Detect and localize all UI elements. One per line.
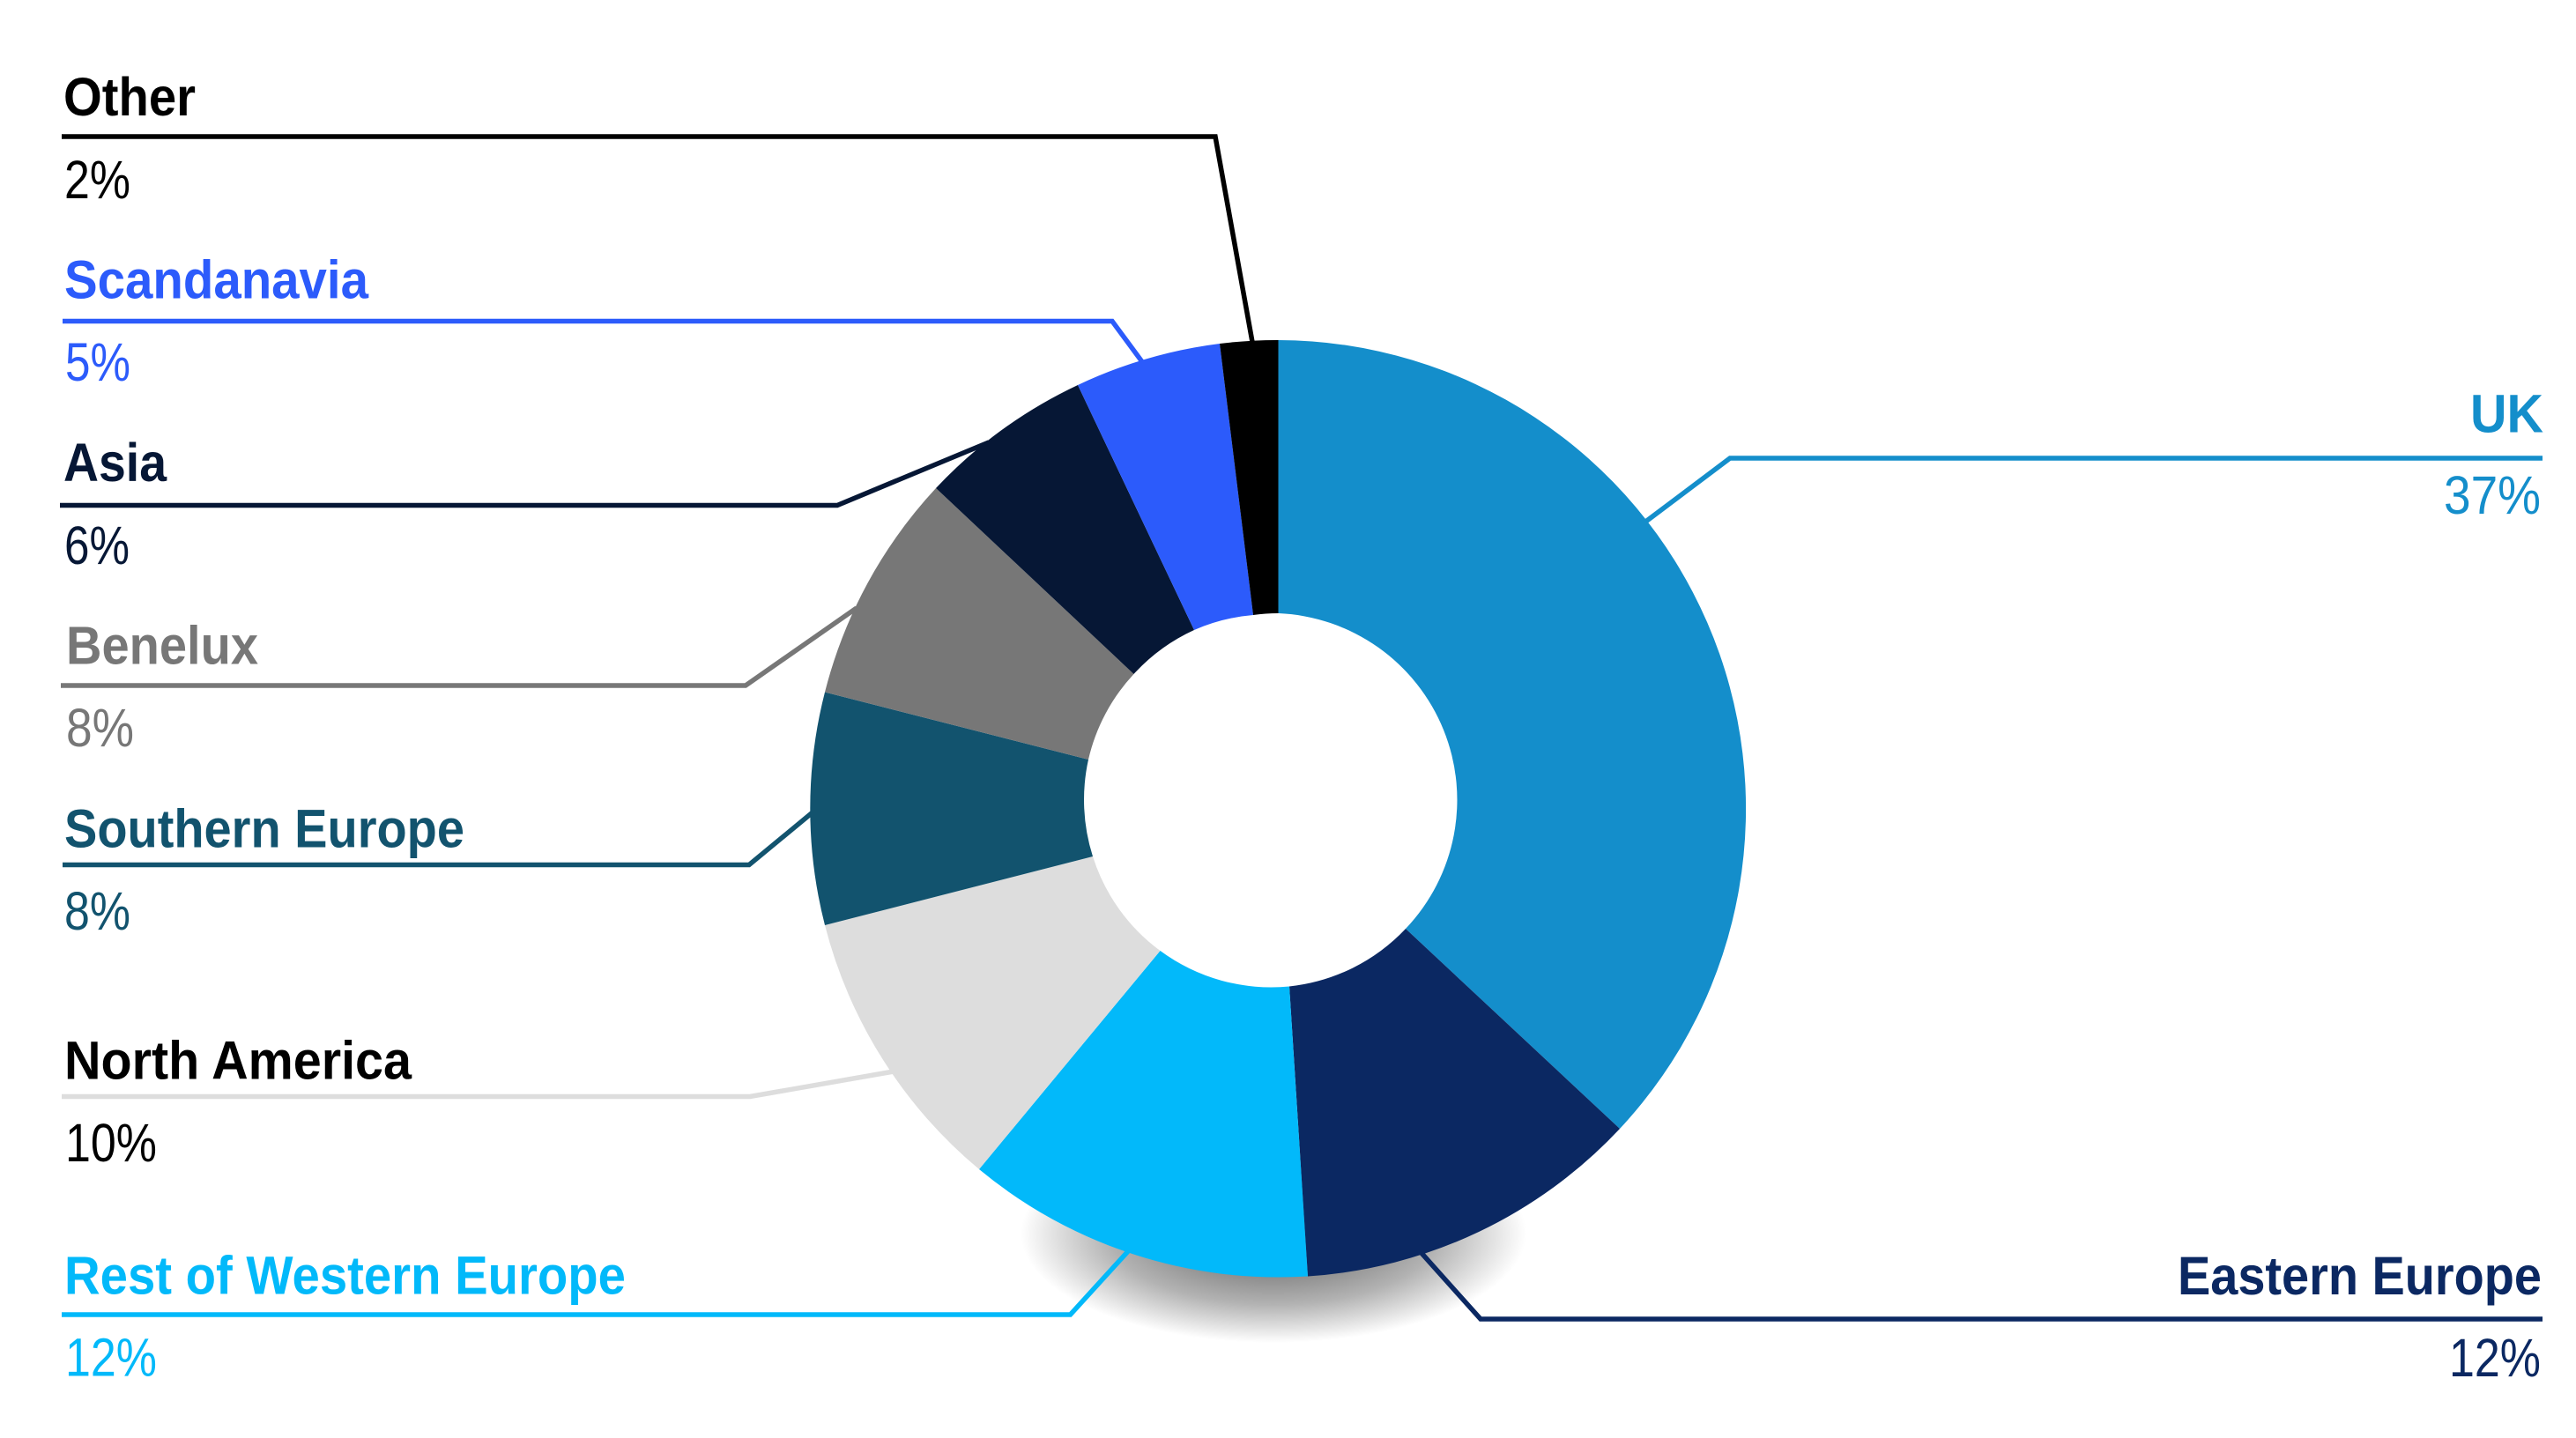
slice: Southern Europe 8% xyxy=(810,693,1093,925)
slice: Eastern Europe 12% xyxy=(1289,929,1620,1276)
value: UK: 37% xyxy=(2444,465,2541,525)
leader line: Southern Europe xyxy=(63,812,813,865)
slice: Benelux 8% xyxy=(825,488,1133,760)
value: Southern Europe: 8% xyxy=(64,881,130,941)
callout: Other xyxy=(62,67,1252,342)
callout: Eastern Europe xyxy=(1421,1246,2543,1388)
leader line: Other xyxy=(62,137,1252,342)
callout: UK xyxy=(1644,384,2543,525)
value: Other: 2% xyxy=(64,150,130,210)
callout: Benelux xyxy=(61,608,857,758)
leader line: Eastern Europe xyxy=(1421,1252,2543,1319)
label: Scandanavia: Scandanavia xyxy=(64,250,369,310)
slice: Asia 6% xyxy=(936,385,1194,674)
callout: North America xyxy=(62,1031,894,1173)
slice: Rest of Western Europe 12% xyxy=(979,951,1308,1278)
value: Eastern Europe: 12% xyxy=(2449,1328,2541,1388)
donut drop shadow xyxy=(1021,1124,1526,1343)
slice: Scandanavia 5% xyxy=(1078,344,1253,630)
value: Scandanavia: 5% xyxy=(65,332,130,392)
label: Other: Other xyxy=(63,67,196,127)
leader line: UK xyxy=(1644,458,2543,523)
value: Rest of Western Europe: 12% xyxy=(65,1327,157,1387)
label: Benelux: Benelux xyxy=(66,615,258,675)
leader line: Scandanavia xyxy=(63,321,1143,363)
leader line: Rest of Western Europe xyxy=(62,1250,1129,1315)
leader line: North America xyxy=(62,1071,894,1096)
callout: Asia xyxy=(60,433,989,575)
value: Asia: 6% xyxy=(64,515,130,575)
slice: Other 2% xyxy=(1220,340,1278,615)
callout: Southern Europe xyxy=(63,798,813,941)
donut chart xyxy=(810,340,1746,1278)
label: Rest of Western Europe: Rest of Western Europe xyxy=(64,1246,626,1306)
slice: UK 37% xyxy=(1278,340,1746,1129)
label: Asia: Asia xyxy=(63,433,167,493)
label: Eastern Europe: Eastern Europe xyxy=(2178,1246,2542,1306)
leader line: Asia xyxy=(60,442,989,506)
label: North America: North America xyxy=(64,1031,412,1091)
callout: Scandanavia xyxy=(63,250,1143,392)
label: UK: UK xyxy=(2470,384,2543,444)
value: North America: 10% xyxy=(65,1113,157,1173)
value: Benelux: 8% xyxy=(66,698,134,758)
leader line: Benelux xyxy=(61,608,857,686)
label: Southern Europe: Southern Europe xyxy=(64,798,464,858)
slice: North America 10% xyxy=(825,856,1160,1169)
callout: Rest of Western Europe xyxy=(62,1246,1129,1387)
